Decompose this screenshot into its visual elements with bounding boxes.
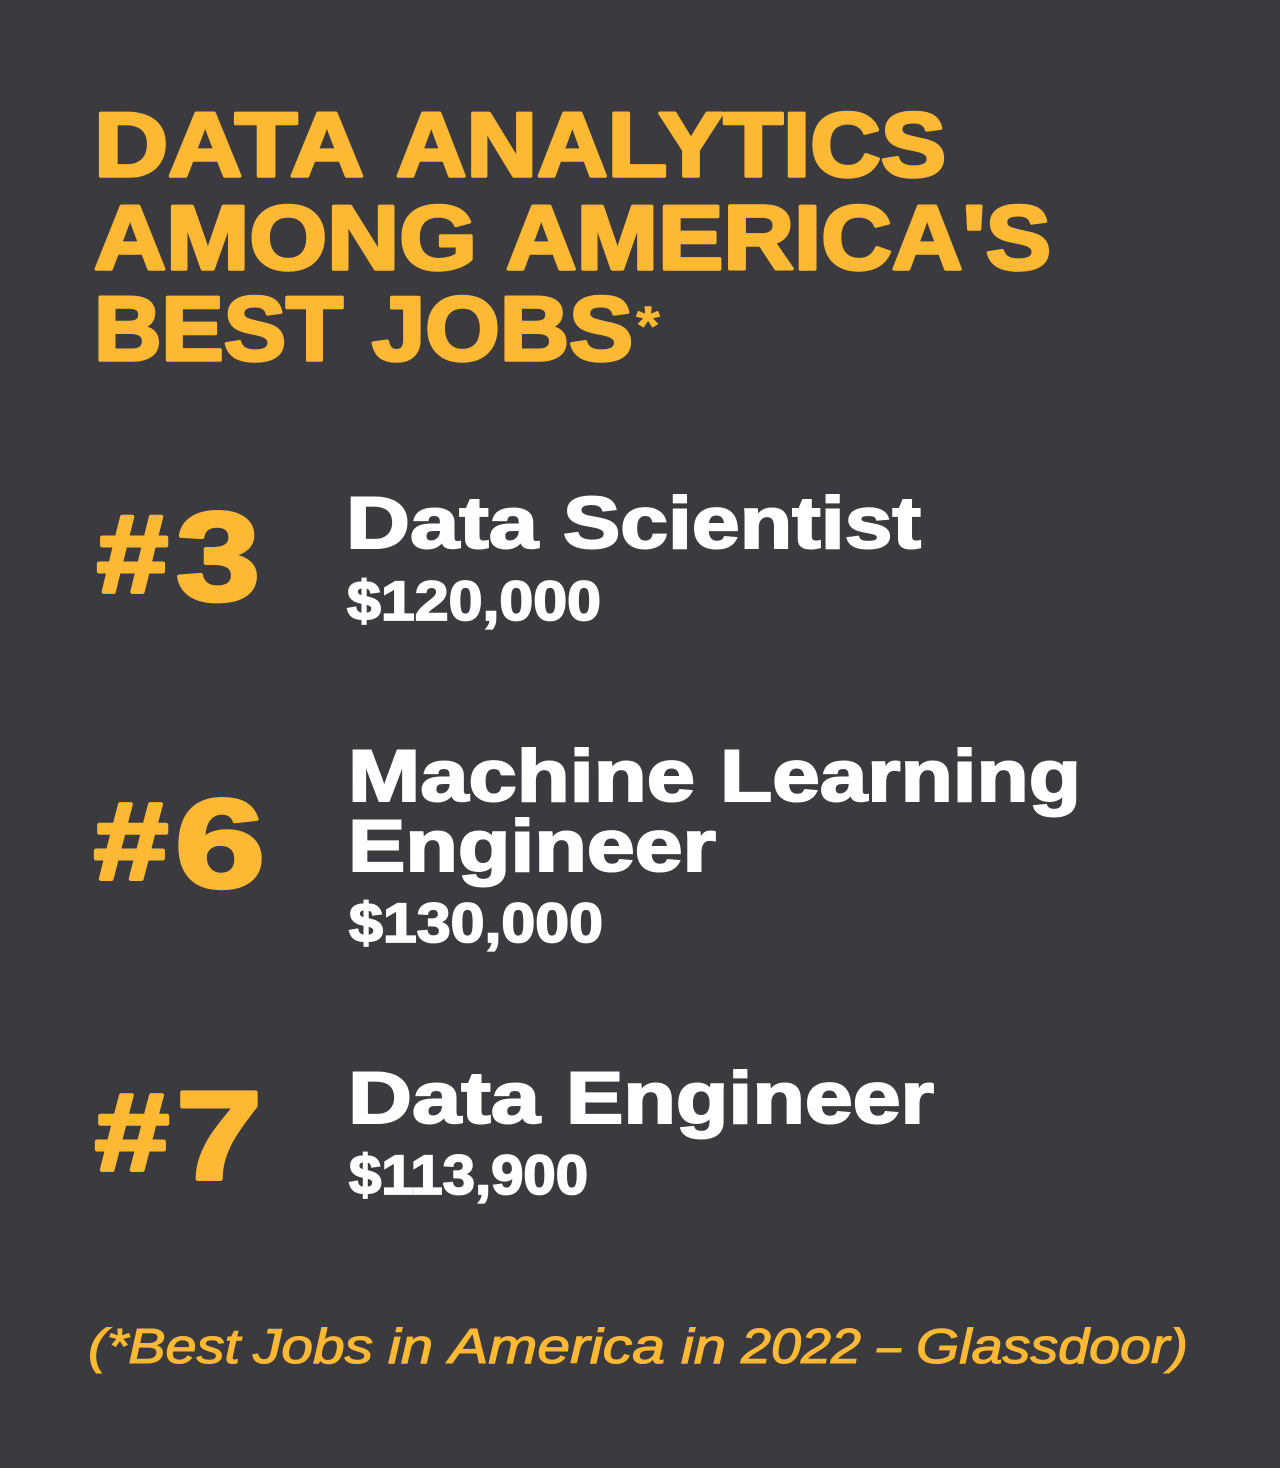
- title: [94, 95, 1051, 380]
- job: Data Scientist: [346, 483, 921, 632]
- title: AMONG: [94, 188, 477, 289]
- rank: #7: #: [95, 1071, 169, 1194]
- job title: Data Scientist: Scientist: [563, 483, 921, 564]
- footnote: Glassdoor): [916, 1320, 1188, 1374]
- rank: #7: 7: [176, 1065, 262, 1206]
- job title: Machine Learning Engineer: Engineer: [348, 806, 716, 887]
- rank: #7: [95, 1065, 262, 1206]
- job title: Data Scientist: [346, 483, 921, 564]
- salary: $130,000: $130,000: [349, 891, 603, 954]
- footnote: Jobs: [252, 1320, 373, 1374]
- job title: Machine Learning Engineer: [348, 736, 1081, 887]
- footnote: (*Best: [88, 1320, 243, 1374]
- title: BEST: [94, 279, 343, 380]
- job title: Machine Learning Engineer: Machine: [348, 736, 695, 817]
- title: *: [636, 294, 660, 357]
- job title: Data Engineer: [348, 1058, 934, 1139]
- rank: #3: 3: [176, 486, 260, 627]
- job title: Data Engineer: Engineer: [566, 1058, 934, 1139]
- title: ANALYTICS: [396, 95, 946, 196]
- title: AMERICA'S: [506, 188, 1051, 289]
- rank: #6: 6: [175, 773, 265, 914]
- title: JOBS: [372, 279, 633, 380]
- salary: $113,900: $113,900: [349, 1143, 588, 1206]
- job: Data Engineer: [348, 1058, 934, 1206]
- footnote: 2022: [740, 1320, 861, 1374]
- title: DATA: [94, 95, 364, 196]
- job title: Data Engineer: Data: [348, 1058, 542, 1139]
- job title: Data Scientist: Data: [346, 483, 540, 564]
- footnote: [88, 1320, 1188, 1374]
- footnote: in: [388, 1320, 433, 1374]
- footnote: in: [681, 1320, 726, 1374]
- rank: #3: [97, 486, 260, 627]
- rank: #6: [94, 773, 265, 914]
- job title: Machine Learning Engineer: Learning: [720, 736, 1081, 817]
- rank: #3: #: [97, 493, 168, 616]
- footnote: America: [445, 1320, 665, 1374]
- footnote: –: [876, 1320, 902, 1374]
- rank: #6: #: [94, 780, 168, 903]
- salary: $120,000: $120,000: [347, 569, 601, 632]
- job: Machine Learning Engineer: [348, 736, 1081, 954]
